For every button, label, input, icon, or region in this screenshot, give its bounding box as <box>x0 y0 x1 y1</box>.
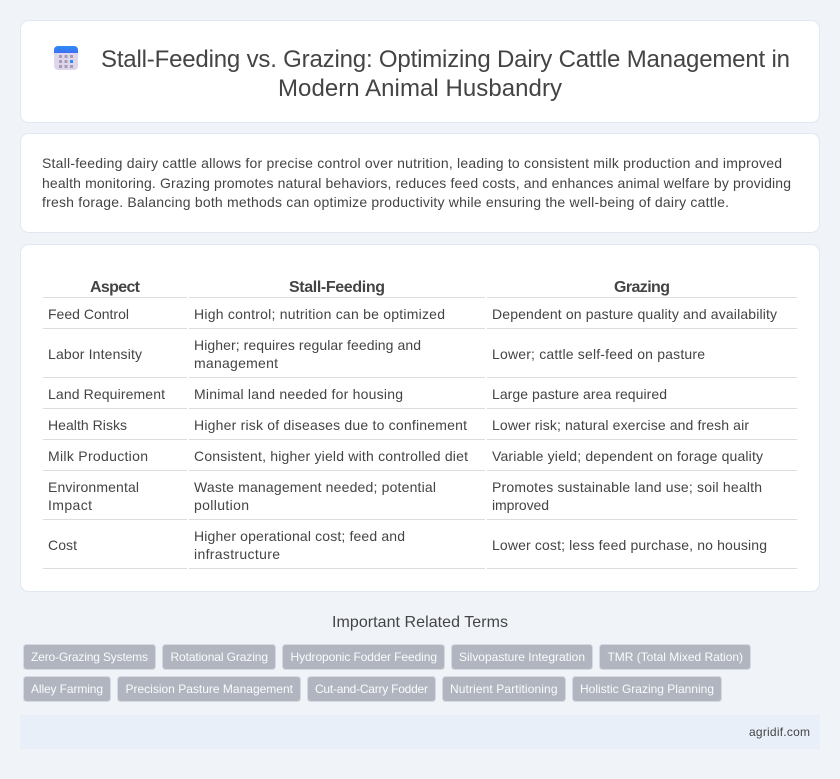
tag: Silvopasture Integration <box>459 650 585 664</box>
tag <box>24 676 110 702</box>
panel: description <box>20 134 820 232</box>
title: Modern Animal Husbandry <box>278 75 562 102</box>
row: land requirement: Large pasture area required <box>492 386 667 402</box>
footer <box>20 715 820 749</box>
row: feed control: High control; nutrition can be optimized <box>194 306 445 322</box>
row: health risks: Health Risks <box>48 417 127 433</box>
text block: description: Stall-feeding dairy cattle allows for precise control over nutrition, leading to consistent milk production and improved <box>42 155 782 171</box>
tag <box>24 644 156 670</box>
table header: Stall-Feeding <box>289 279 385 296</box>
row: labor intensity: Higher; requires regular feeding and <box>194 337 421 353</box>
tag <box>572 676 722 702</box>
row: feed control <box>48 306 777 322</box>
tag: Holistic Grazing Planning <box>580 682 714 696</box>
row: environmental impact: pollution <box>194 497 249 513</box>
row: environmental impact: Waste management needed; potential <box>194 479 436 495</box>
row: labor intensity <box>48 337 705 371</box>
table header: Grazing <box>614 279 670 296</box>
icon: calendar <box>54 46 78 70</box>
tag: Nutrient Partitioning <box>450 682 558 696</box>
row: labor intensity: Labor Intensity <box>48 346 142 362</box>
title: Stall-Feeding vs. Grazing: Optimizing Dairy Cattle Management in <box>101 46 790 73</box>
row: cost: infrastructure <box>194 546 280 562</box>
tag <box>308 676 436 702</box>
row: health risks: Lower risk; natural exercise and fresh air <box>492 417 749 433</box>
row: land requirement: Minimal land needed for housing <box>194 386 403 402</box>
row: cost: Higher operational cost; feed and <box>194 528 405 544</box>
tag: Zero-Grazing Systems <box>31 650 148 664</box>
row: cost: Lower cost; less feed purchase, no housing <box>492 537 767 553</box>
tag <box>442 676 566 702</box>
title <box>101 46 790 102</box>
tag <box>162 644 276 670</box>
row: health risks <box>48 417 749 433</box>
tag: Alley Farming <box>31 682 103 696</box>
text block: description: health monitoring. Grazing promotes natural behaviors, reduces feed costs, and enhances animal welfare by providing <box>42 175 791 191</box>
tag: Precision Pasture Management <box>126 682 294 696</box>
row: cost <box>48 528 767 562</box>
row: milk production: Milk Production <box>48 448 148 464</box>
table header <box>90 279 670 296</box>
row: milk production: Variable yield; dependent on forage quality <box>492 448 763 464</box>
heading: related terms: Important Related Terms <box>332 614 508 631</box>
table header: Aspect <box>90 279 141 296</box>
row: labor intensity: Lower; cattle self-feed on pasture <box>492 346 705 362</box>
row: milk production <box>48 448 763 464</box>
panel: comparison table <box>20 244 820 592</box>
panel: header <box>20 20 820 122</box>
row: labor intensity: management <box>194 355 278 371</box>
row: environmental impact: Environmental <box>48 479 139 495</box>
footer: agridif.com <box>749 725 810 739</box>
tag <box>452 644 592 670</box>
tag <box>118 676 300 702</box>
tag: Rotational Grazing <box>170 650 268 664</box>
row: environmental impact <box>48 479 762 513</box>
row: milk production: Consistent, higher yield with controlled diet <box>194 448 468 464</box>
row: land requirement <box>48 386 667 402</box>
text block: description <box>42 155 791 210</box>
tag list: related terms <box>24 644 750 702</box>
row: environmental impact: improved <box>492 497 549 513</box>
tag <box>600 644 750 670</box>
tag: Cut-and-Carry Fodder <box>315 682 428 696</box>
tag: Hydroponic Fodder Feeding <box>290 650 437 664</box>
tag <box>282 644 444 670</box>
row: environmental impact: Promotes sustainable land use; soil health <box>492 479 762 495</box>
row: feed control: Feed Control <box>48 306 129 322</box>
text block: description: fresh forage. Balancing both methods can optimize productivity while ensuring the well-being of dairy cattle. <box>42 194 729 210</box>
row: land requirement: Land Requirement <box>48 386 165 402</box>
row: health risks: Higher risk of diseases due to confinement <box>194 417 467 433</box>
row: cost: Cost <box>48 537 77 553</box>
tag: TMR (Total Mixed Ration) <box>608 650 743 664</box>
row: environmental impact: Impact <box>48 497 92 513</box>
row: feed control: Dependent on pasture quality and availability <box>492 306 777 322</box>
